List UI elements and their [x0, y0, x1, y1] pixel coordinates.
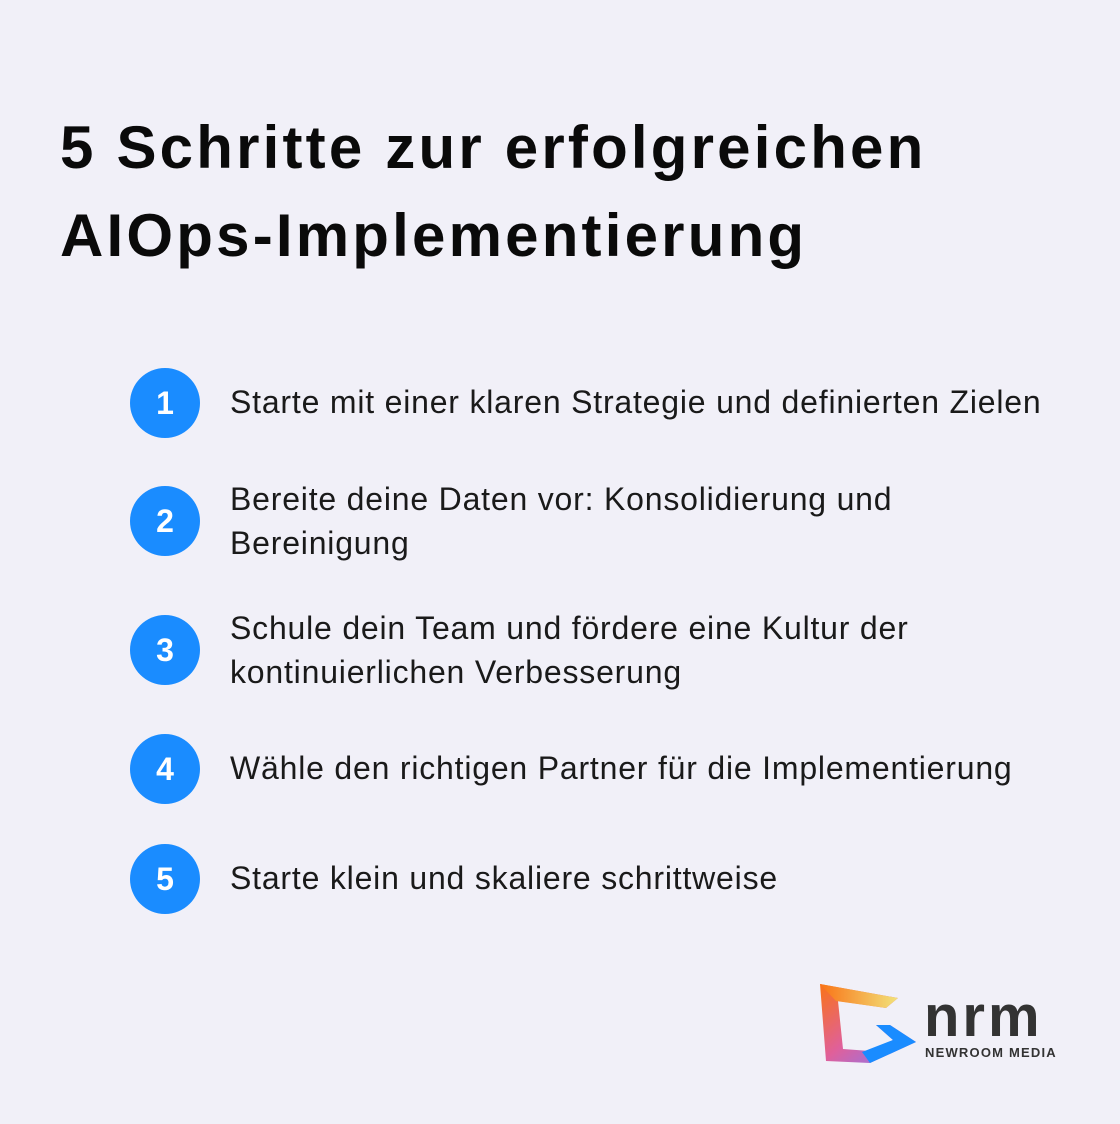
step 1 — [130, 368, 1041, 438]
logo — [820, 984, 1057, 1063]
step 3: Schule dein Team und fördere eine Kultur der — [230, 610, 909, 646]
step 5: 5 — [156, 861, 174, 897]
title: AIOps-Implementierung — [60, 202, 807, 269]
logo: nrm — [924, 984, 1043, 1049]
step 1: Starte mit einer klaren Strategie und definierten Zielen — [230, 384, 1041, 420]
step 3 — [130, 610, 909, 690]
step 3: 3 — [156, 632, 174, 668]
step 2: 2 — [156, 503, 174, 539]
title: 5 Schritte zur erfolgreichen — [60, 114, 926, 181]
step 3: kontinuierlichen Verbesserung — [230, 654, 682, 690]
step 5 — [130, 844, 778, 914]
step 4: Wähle den richtigen Partner für die Implementierung — [230, 750, 1013, 786]
step 1: 1 — [156, 385, 174, 421]
step 5: Starte klein und skaliere schrittweise — [230, 860, 778, 896]
step 4 — [130, 734, 1013, 804]
title — [60, 114, 926, 269]
step 2 — [130, 481, 892, 561]
step 4: 4 — [156, 751, 174, 787]
step 2: Bereite deine Daten vor: Konsolidierung und — [230, 481, 892, 517]
logo: NEWROOM MEDIA — [925, 1045, 1057, 1060]
step 2: Bereinigung — [230, 525, 410, 561]
